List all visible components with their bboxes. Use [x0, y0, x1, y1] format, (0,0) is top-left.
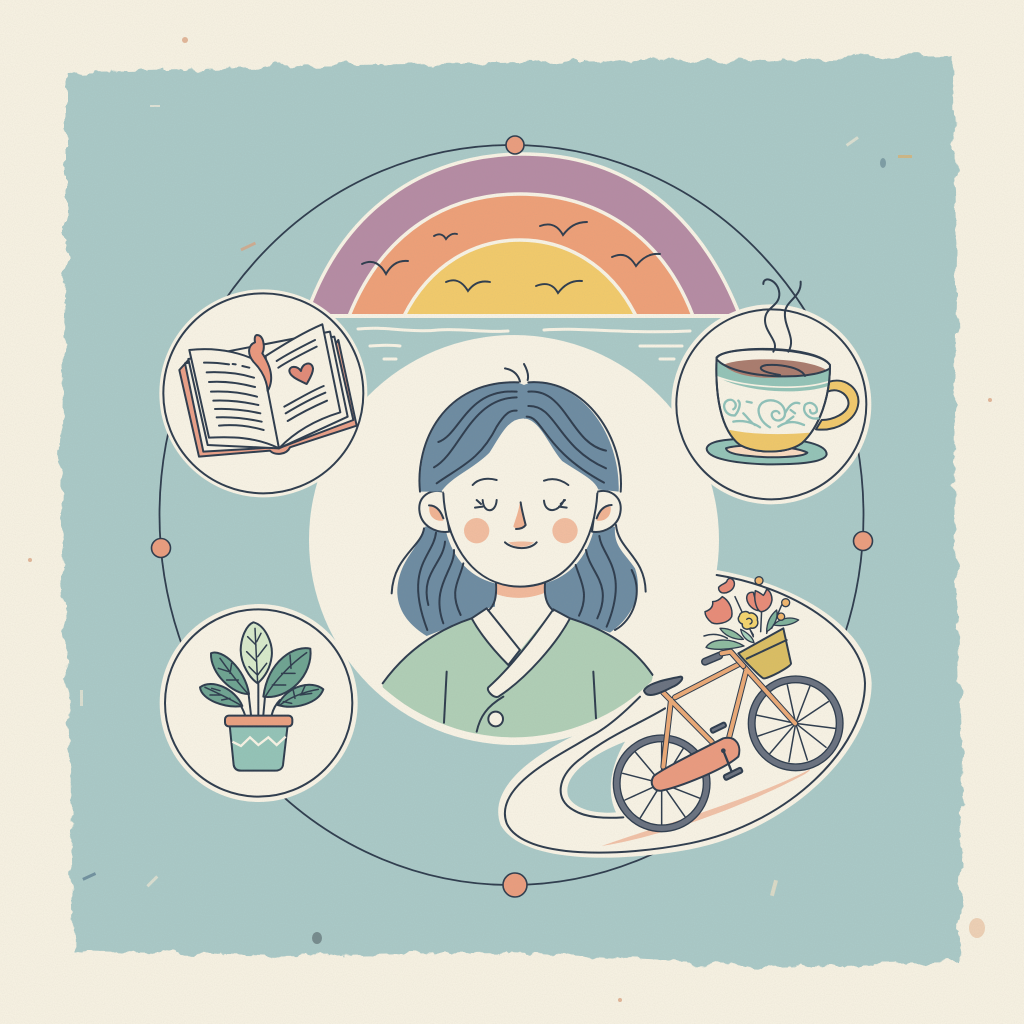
sunrise rainbow [306, 154, 740, 316]
handlebar grip [705, 656, 719, 662]
open pages [189, 349, 279, 448]
saucer [707, 438, 827, 464]
leaf far right [278, 685, 323, 707]
leaf inner right [263, 648, 311, 697]
hair strands [419, 364, 621, 492]
nose [513, 502, 526, 529]
back wheel spokes [623, 740, 700, 825]
yellow flower [738, 612, 758, 629]
winding road with bicycle [498, 570, 872, 858]
right page text [277, 340, 327, 421]
pot zigzag [232, 737, 286, 746]
birds [362, 222, 660, 293]
stems [235, 683, 280, 715]
clothing [382, 620, 653, 738]
bookmark ribbon [249, 335, 271, 391]
face [443, 418, 597, 587]
cheeks [464, 518, 489, 543]
top hair [420, 383, 619, 492]
cover [179, 340, 357, 457]
heart [289, 363, 313, 384]
left page text [204, 363, 264, 430]
leaf far left [200, 684, 242, 706]
road inner gap [567, 742, 625, 813]
smile [508, 541, 534, 547]
yellow band [727, 429, 810, 451]
road surface [498, 570, 872, 858]
teal rim band [717, 362, 830, 391]
heart bud [719, 578, 734, 593]
basket [738, 628, 791, 678]
tulip right [747, 592, 758, 611]
portrait: woman with closed eyes [382, 363, 654, 738]
teal textured square panel [60, 56, 962, 966]
left collar [472, 608, 520, 665]
orange buds [755, 577, 763, 585]
closed eyes [475, 500, 567, 510]
button [488, 712, 503, 726]
horizon line and water ripples [303, 314, 743, 359]
front wheel spokes [756, 685, 835, 762]
ears [419, 491, 449, 532]
pot rim [225, 716, 292, 726]
swirl decoration [724, 400, 818, 427]
coffee [723, 359, 827, 378]
orbit dots [152, 136, 872, 897]
garment seams [444, 672, 596, 732]
neck lines [488, 583, 553, 611]
road edges [505, 575, 865, 853]
top pale leaf [241, 622, 272, 683]
steam [763, 279, 801, 352]
chain guard [652, 738, 739, 791]
handlebar stem over basket [722, 652, 743, 666]
road shadow [602, 769, 810, 846]
page stack [185, 337, 353, 452]
eyebrows [473, 479, 568, 485]
neck shadow [495, 583, 545, 598]
right collar [488, 609, 570, 697]
cup body [716, 349, 830, 452]
orbit ring [160, 145, 864, 885]
front wheel [752, 679, 840, 767]
pot [230, 725, 288, 771]
saddle [644, 677, 682, 695]
book medallion [159, 289, 367, 497]
frame [663, 652, 795, 767]
leaf veins [205, 628, 318, 705]
tulip left [705, 597, 732, 624]
leaf inner left [211, 653, 249, 694]
lower hair left [397, 527, 495, 636]
bouquet stems [735, 597, 782, 637]
back wheel [617, 738, 707, 828]
bouquet leaves [704, 610, 799, 649]
lower hair right [545, 527, 638, 633]
coffee cup medallion [671, 279, 871, 504]
large centre portrait circle [309, 335, 719, 745]
handle [816, 381, 858, 430]
crank and pedals [723, 751, 732, 772]
plant medallion [160, 604, 358, 802]
